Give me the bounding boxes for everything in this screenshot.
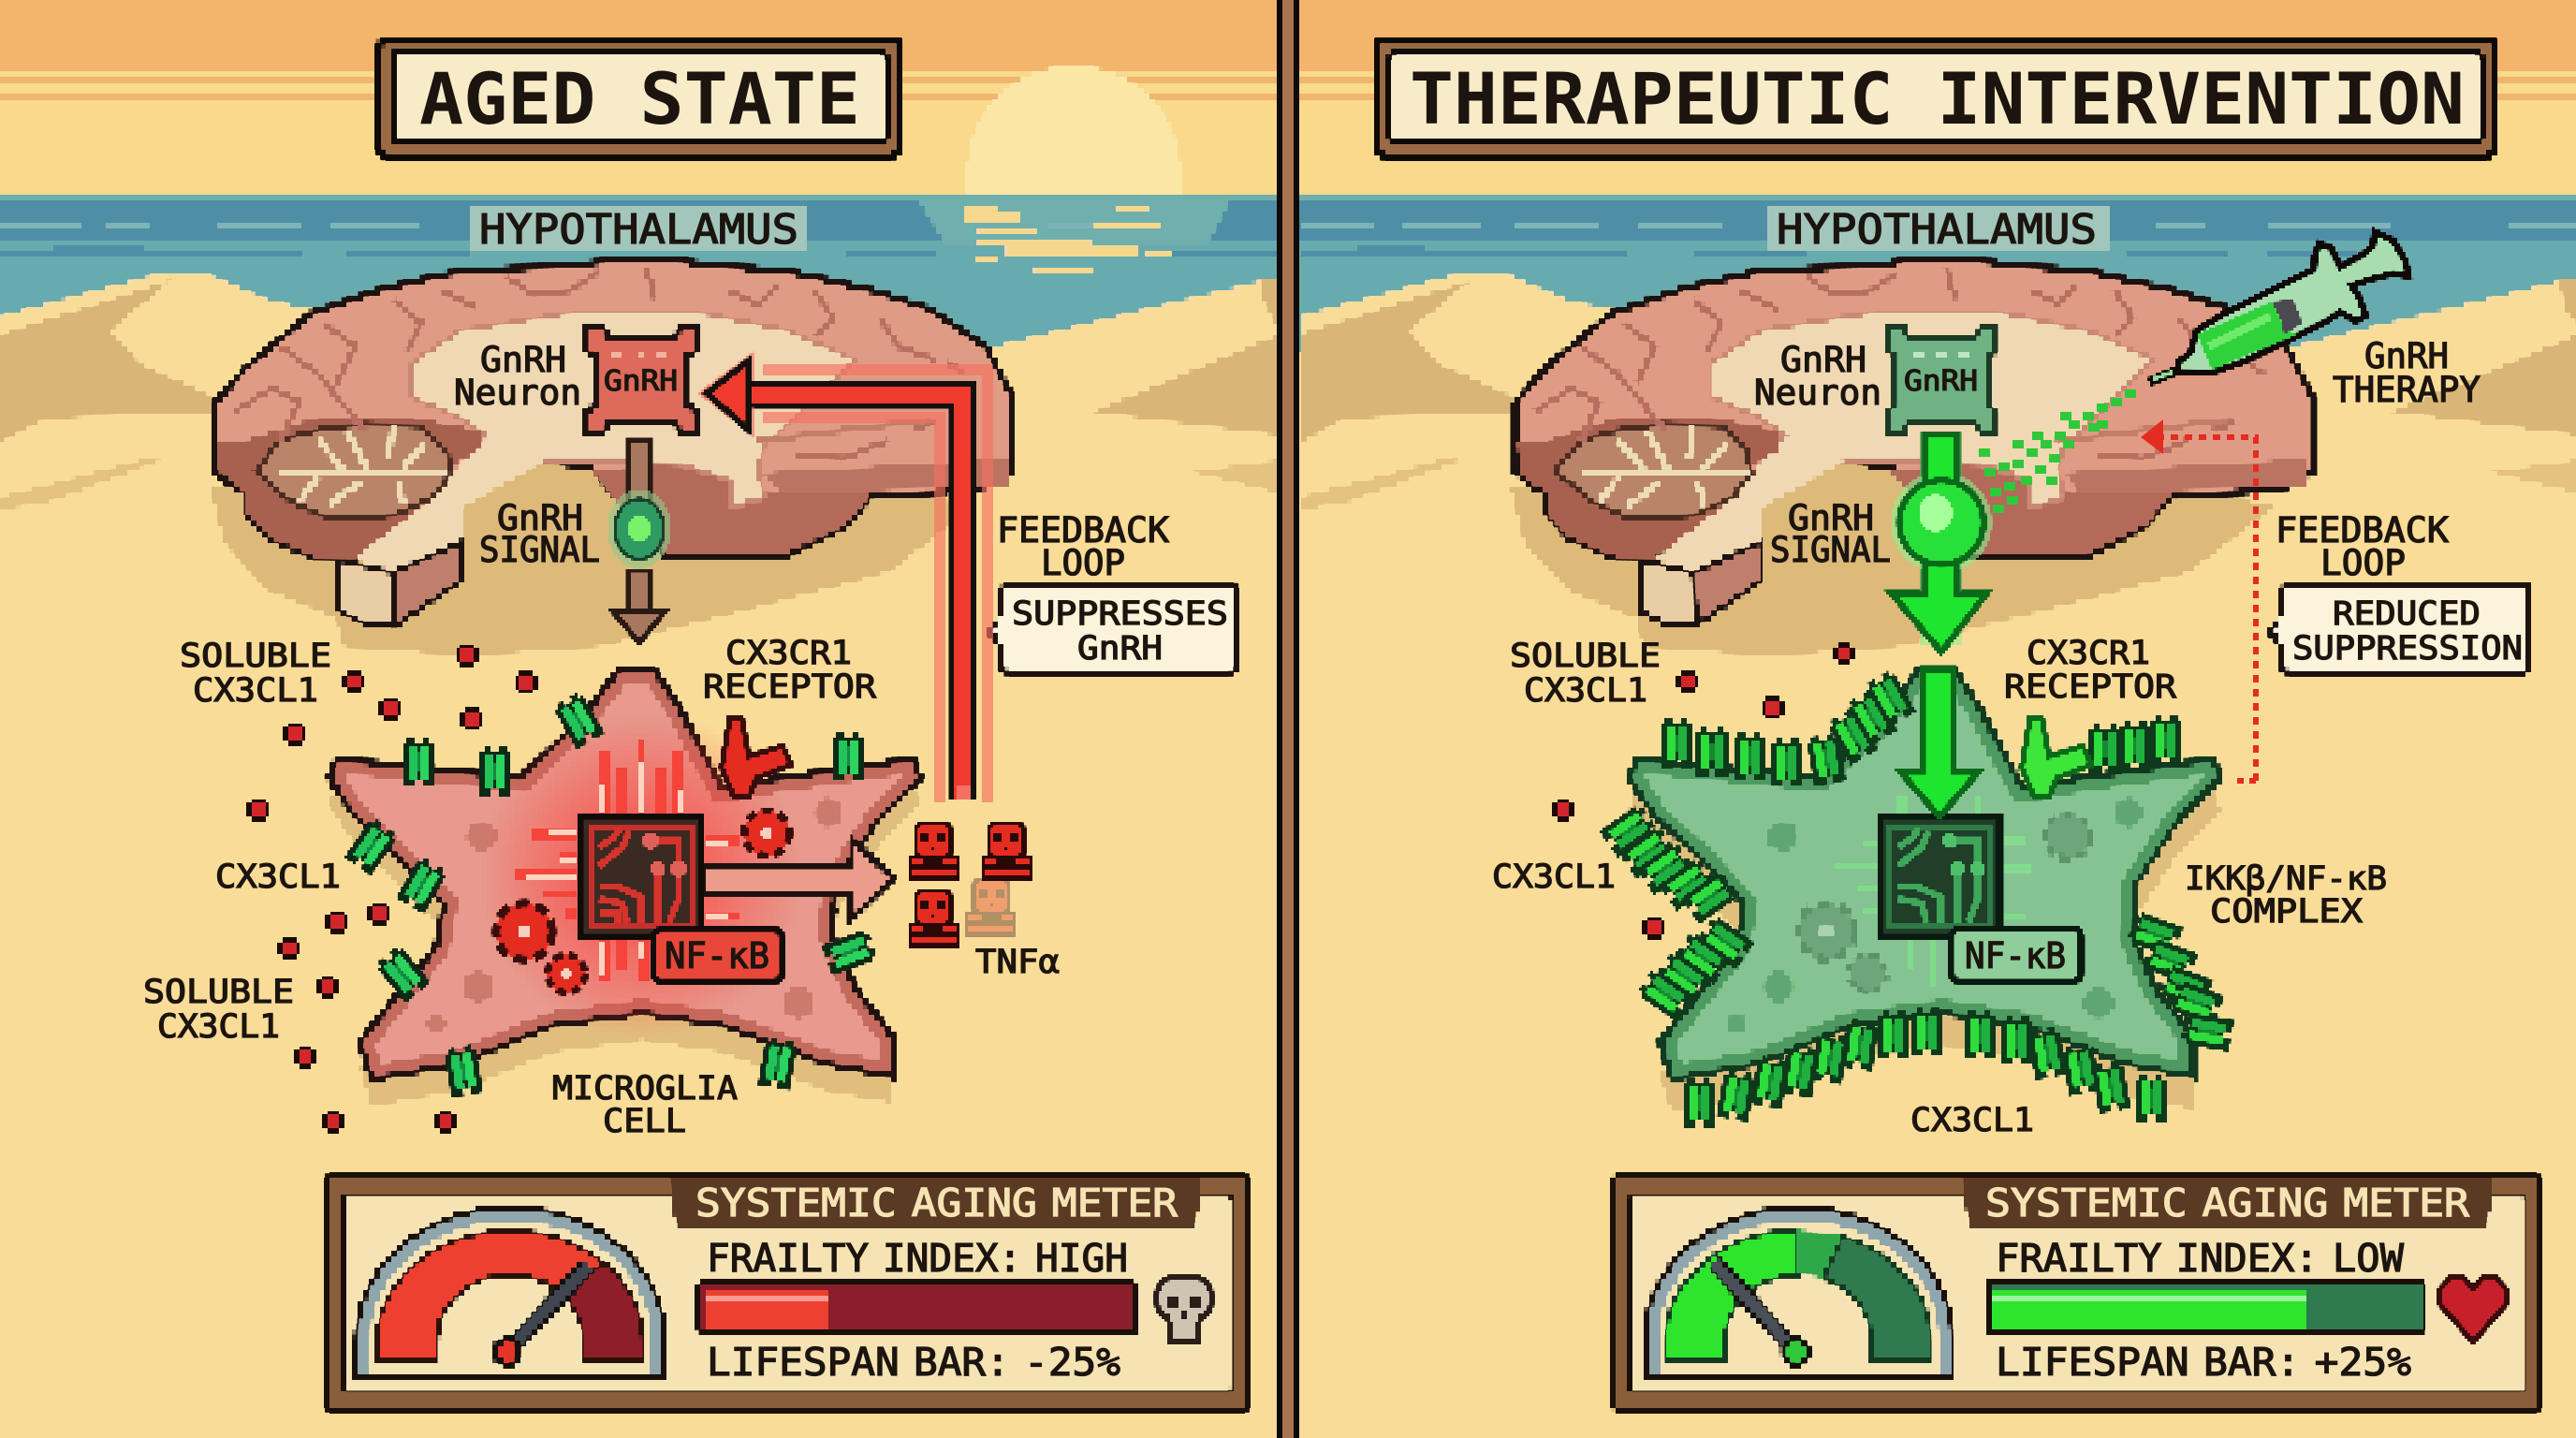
frailty bar: high [699,1283,1135,1334]
hypothalamus label plate [1767,205,2108,251]
soluble CX3CL1 particles [247,644,537,1133]
CX3CL1 membrane receptors (sparse) [344,691,878,1098]
CX3CR1 receptor (red) [722,717,791,797]
callout text: reduced suppression: SUPPRESSION [2292,630,2523,668]
feedback arrow (strong) [697,351,988,801]
label: feedback loop: FEEDBACK [997,510,1170,550]
fine details: aged state [247,351,1211,1341]
label: CX3CL1: CX3CL1 [215,858,341,896]
label: soluble CX3CL1 top [180,638,331,710]
label: soluble CX3CL1 lower [143,974,294,1046]
label: NF-kB: NF-κB [1965,935,2066,976]
green arrow into chip [1901,669,1978,816]
meter title: SYSTEMIC AGING METER [1985,1181,2469,1225]
label: feedback loop [2276,510,2450,583]
callout: suppresses GnRH [989,585,1237,672]
label: feedback loop [997,510,1170,583]
label: NF-kB: NF-κB [665,935,769,976]
label: GnRH therapy: GnRH [2364,336,2449,376]
frailty index text: FRAILTY INDEX: HIGH [707,1236,1128,1281]
label: TNF alpha: TNFα [975,944,1060,981]
label: microglia cell: CELL [603,1103,686,1140]
icon: skull [1157,1277,1211,1341]
label: GnRH neuron: GnRH [1780,340,1866,380]
label: microglia cell: MICROGLIA [552,1070,738,1108]
frailty bar: low [1987,1283,2424,1334]
label: IKKb/NF-kB complex [2185,860,2387,931]
heading: hypothalamus: HYPOTHALAMUS [1777,206,2097,254]
label: IKKb/NF-kB complex: COMPLEX [2210,893,2363,931]
label: GnRH on neuron: GnRH [1904,365,1978,398]
CX3CR1 receptor (green) [2022,717,2091,797]
CX3CL1 membrane receptors (dense) [1600,669,2234,1127]
callout text: reduced suppression [2292,595,2523,668]
label: GnRH neuron: Neuron [1754,373,1881,413]
label: CX3CL1 left: CX3CL1 [1492,858,1616,896]
TNF output arrow [701,839,893,918]
feedback loop reduced: dotted red arrow [2141,419,2256,781]
label: GnRH signal: SIGNAL [479,530,600,570]
callout text: suppresses GnRH [1012,595,1228,668]
systemic aging meter frame (left) [325,1176,1250,1410]
label: GnRH neuron: Neuron [454,373,581,413]
label: feedback loop: LOOP [2320,543,2406,583]
icon: heart [2439,1278,2507,1342]
frailty index text: FRAILTY INDEX: LOW [1996,1236,2404,1281]
lifespan text: LIFESPAN BAR: -25% [707,1340,1120,1385]
label: CX3CR1 receptor [703,635,877,706]
meter title: SYSTEMIC AGING METER [695,1181,1178,1225]
label: soluble CX3CL1 top: CX3CL1 [193,672,318,710]
label: GnRH signal: GnRH [497,498,583,538]
label: feedback loop: LOOP [1041,543,1125,583]
label: GnRH signal: GnRH [1788,498,1874,538]
gauge: high [357,1208,665,1378]
microglia cell body (healthy) [1630,669,2220,1111]
fine details: therapeutic intervention [1552,232,2507,1342]
label: soluble CX3CL1 lower: CX3CL1 [157,1008,280,1046]
label: microglia cell [552,1070,738,1140]
label: GnRH therapy: THERAPY [2333,370,2481,410]
title: aged state: AGED STATE [419,57,860,140]
NF-kB tag [653,930,782,981]
microglia cell body [329,669,920,1106]
GnRH signal arrow (strong) [1891,431,1992,652]
callout: reduced suppression [2270,585,2530,672]
callout text: suppresses GnRH: SUPPRESSES [1012,595,1228,633]
label: feedback loop: FEEDBACK [2276,510,2450,550]
label: GnRH signal [1770,498,1891,570]
label: soluble CX3CL1 [1510,638,1661,710]
syringe [2149,232,2408,382]
label: GnRH signal: SIGNAL [1770,530,1891,570]
callout text: reduced suppression: REDUCED [2333,595,2481,633]
label: CX3CR1 receptor: RECEPTOR [2004,668,2177,706]
brain [1511,259,2312,655]
labels: therapeutic intervention [1410,57,2523,1385]
label: GnRH signal [479,498,600,570]
GnRH neuron body [1887,328,1997,433]
NF-kB chip [581,817,701,936]
label: CX3CL1 bottom: CX3CL1 [1910,1102,2034,1139]
label: soluble CX3CL1: SOLUBLE [1510,638,1661,675]
title frame: therapeutic intervention [1374,36,2497,159]
label: GnRH neuron [454,340,581,413]
hypothalamus label plate [468,205,809,251]
label: IKKb/NF-kB complex: IKKβ/NF-κB [2185,860,2387,898]
GnRH signal arrow (weak) [607,441,671,642]
label: GnRH therapy [2333,336,2481,410]
callout text: suppresses GnRH: GnRH [1077,630,1163,668]
systemic aging meter frame (right) [1612,1176,2541,1410]
panel: therapeutic intervention artwork [1374,36,2541,1410]
GnRH neuron body [587,328,696,433]
NF-kB chip (dim) [1881,817,1999,936]
center divider [1277,0,1299,1438]
heading: hypothalamus: HYPOTHALAMUS [479,206,798,254]
title frame: aged state [376,36,902,159]
brain [211,259,1012,655]
lifespan text: LIFESPAN BAR: +25% [1996,1340,2411,1385]
soluble CX3CL1 particles (few) [1552,642,1855,939]
panel: aged state artwork [211,36,1250,1410]
label: CX3CR1 receptor [2004,635,2177,706]
calm rays [1835,796,2029,985]
TNF alpha skulls [908,822,1032,947]
label: soluble CX3CL1 lower: SOLUBLE [143,974,294,1011]
NF-kB tag [1952,929,2081,981]
gears (calm) [1798,814,2090,992]
label: CX3CR1 receptor: CX3CR1 [2027,635,2150,672]
gauge: low [1645,1208,1953,1378]
inflammatory glow and rays [477,712,805,1039]
label: GnRH neuron [1754,340,1881,413]
label: GnRH on neuron: GnRH [604,365,678,398]
gears [496,811,789,992]
label: soluble CX3CL1: CX3CL1 [1524,672,1647,710]
labels: aged state [143,57,1228,1385]
label: soluble CX3CL1 top: SOLUBLE [180,638,331,675]
label: CX3CR1 receptor: CX3CR1 [725,635,852,672]
label: GnRH neuron: GnRH [480,340,566,380]
injected therapy spray [1980,389,2136,514]
title: therapeutic intervention: THERAPEUTIC INTERVENTION [1410,57,2465,140]
label: CX3CR1 receptor: RECEPTOR [703,668,877,706]
